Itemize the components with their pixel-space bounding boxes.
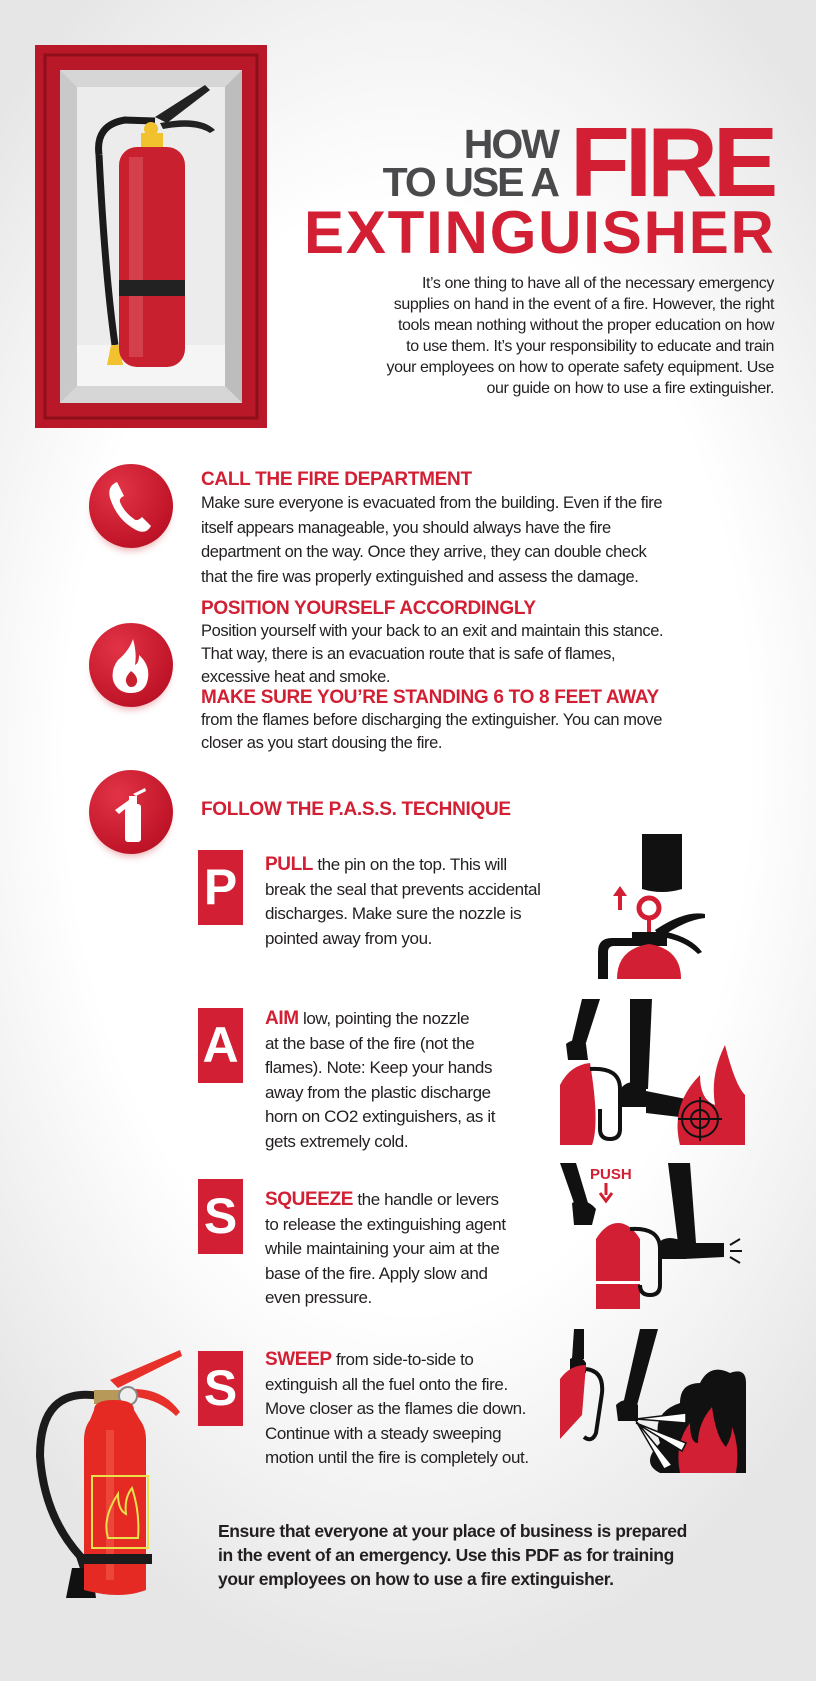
intro paragraph: our guide on how to use a fire extinguisher. xyxy=(486,380,774,397)
step A: flames). Note: Keep your hands xyxy=(265,1058,492,1077)
closing text: Ensure that everyone at your place of business is prepared xyxy=(218,1521,687,1541)
section: position yourself: Position yourself with your back to an exit and maintain this stance. xyxy=(201,622,663,640)
step A: gets extremely cold. xyxy=(265,1132,408,1150)
step S sweep: Continue with a steady sweeping xyxy=(265,1424,501,1442)
step S sweep: motion until the fire is completely out. xyxy=(265,1448,529,1467)
title xyxy=(304,107,776,266)
step A xyxy=(198,1008,496,1150)
step S squeeze: SQUEEZE the handle or levers xyxy=(265,1189,499,1210)
step S squeeze: to release the extinguishing agent xyxy=(265,1214,506,1234)
section: call the fire department xyxy=(201,469,662,586)
intro paragraph: tools mean nothing without the proper education on how xyxy=(398,317,774,334)
intro paragraph: It’s one thing to have all of the necessary emergency xyxy=(422,275,774,292)
section: position yourself xyxy=(201,598,663,752)
step S squeeze: S xyxy=(204,1188,237,1244)
icon: extinguisher xyxy=(89,770,173,854)
pictogram: squeeze xyxy=(560,1163,742,1309)
step A: away from the plastic discharge xyxy=(265,1082,491,1102)
title: TO USE A xyxy=(383,159,558,205)
step P: pointed away from you. xyxy=(265,928,432,948)
section: call the fire department: itself appears manageable, you should always have the fire xyxy=(201,518,611,536)
step S squeeze: even pressure. xyxy=(265,1288,372,1307)
intro paragraph: to use them. It’s your responsibility to educate and train xyxy=(406,338,774,355)
step P: break the seal that prevents accidental xyxy=(265,880,540,898)
step A: at the base of the fire (not the xyxy=(265,1034,474,1052)
pictogram: sweep xyxy=(560,1329,746,1473)
section: call the fire department: that the fire was properly extinguished and assess the damage. xyxy=(201,568,638,586)
step A: horn on CO2 extinguishers, as it xyxy=(265,1107,495,1126)
step S sweep xyxy=(198,1349,529,1467)
step S sweep: extinguish all the fuel onto the fire. xyxy=(265,1374,508,1394)
intro paragraph: supplies on hand in the event of a fire. However, the right xyxy=(394,296,774,313)
pictogram: aim xyxy=(560,999,745,1145)
pictogram: squeeze: PUSH xyxy=(590,1166,632,1183)
closing text: in the event of an emergency. Use this PDF as for training xyxy=(218,1545,674,1565)
step S sweep: SWEEP from side-to-side to xyxy=(265,1349,473,1370)
step S squeeze: while maintaining your aim at the xyxy=(265,1239,499,1258)
section: call the fire department: department on the way. Once they arrive, they can double check xyxy=(201,543,646,561)
step P: PULL the pin on the top. This will xyxy=(265,854,507,875)
step A: AIM low, pointing the nozzle xyxy=(265,1008,469,1029)
framed extinguisher illustration xyxy=(35,45,267,428)
closing text: your employees on how to use a fire extinguisher. xyxy=(218,1569,614,1589)
step A: A xyxy=(202,1017,239,1073)
pictogram: pull pin xyxy=(598,834,705,979)
section: call the fire department: Make sure everyone is evacuated from the building. Even if the fire xyxy=(201,494,662,512)
step P xyxy=(198,850,540,948)
section: position yourself: from the flames before discharging the extinguisher. You can move xyxy=(201,711,662,729)
step S squeeze xyxy=(198,1179,506,1307)
step S squeeze: base of the fire. Apply slow and xyxy=(265,1264,488,1282)
icon: flame xyxy=(89,623,173,707)
section: call the fire department: CALL THE FIRE DEPARTMENT xyxy=(201,469,472,490)
section: position yourself: That way, there is an evacuation route that is safe of flames, xyxy=(201,645,615,663)
step S sweep: Move closer as the flames die down. xyxy=(265,1399,526,1418)
section: position yourself: POSITION YOURSELF ACCORDINGLY xyxy=(201,598,536,619)
title: EXTINGUISHER xyxy=(304,199,776,266)
step P: discharges. Make sure the nozzle is xyxy=(265,904,521,923)
bottom extinguisher illustration xyxy=(36,1350,182,1598)
section: position yourself: closer as you start dousing the fire. xyxy=(201,734,442,752)
intro paragraph xyxy=(386,275,774,397)
title: HOW xyxy=(464,121,558,167)
section: position yourself: excessive heat and smoke. xyxy=(201,668,390,686)
section: position yourself: MAKE SURE YOU’RE STANDING 6 TO 8 FEET AWAY xyxy=(201,687,659,708)
closing text xyxy=(218,1521,687,1589)
icon: phone xyxy=(89,464,173,548)
title: FIRE xyxy=(570,107,773,217)
intro paragraph: your employees on how to operate safety equipment. Use xyxy=(386,359,774,376)
heading: PASS technique: FOLLOW THE P.A.S.S. TECHNIQUE xyxy=(201,799,511,820)
step P: P xyxy=(204,859,237,915)
step S sweep: S xyxy=(204,1360,237,1416)
